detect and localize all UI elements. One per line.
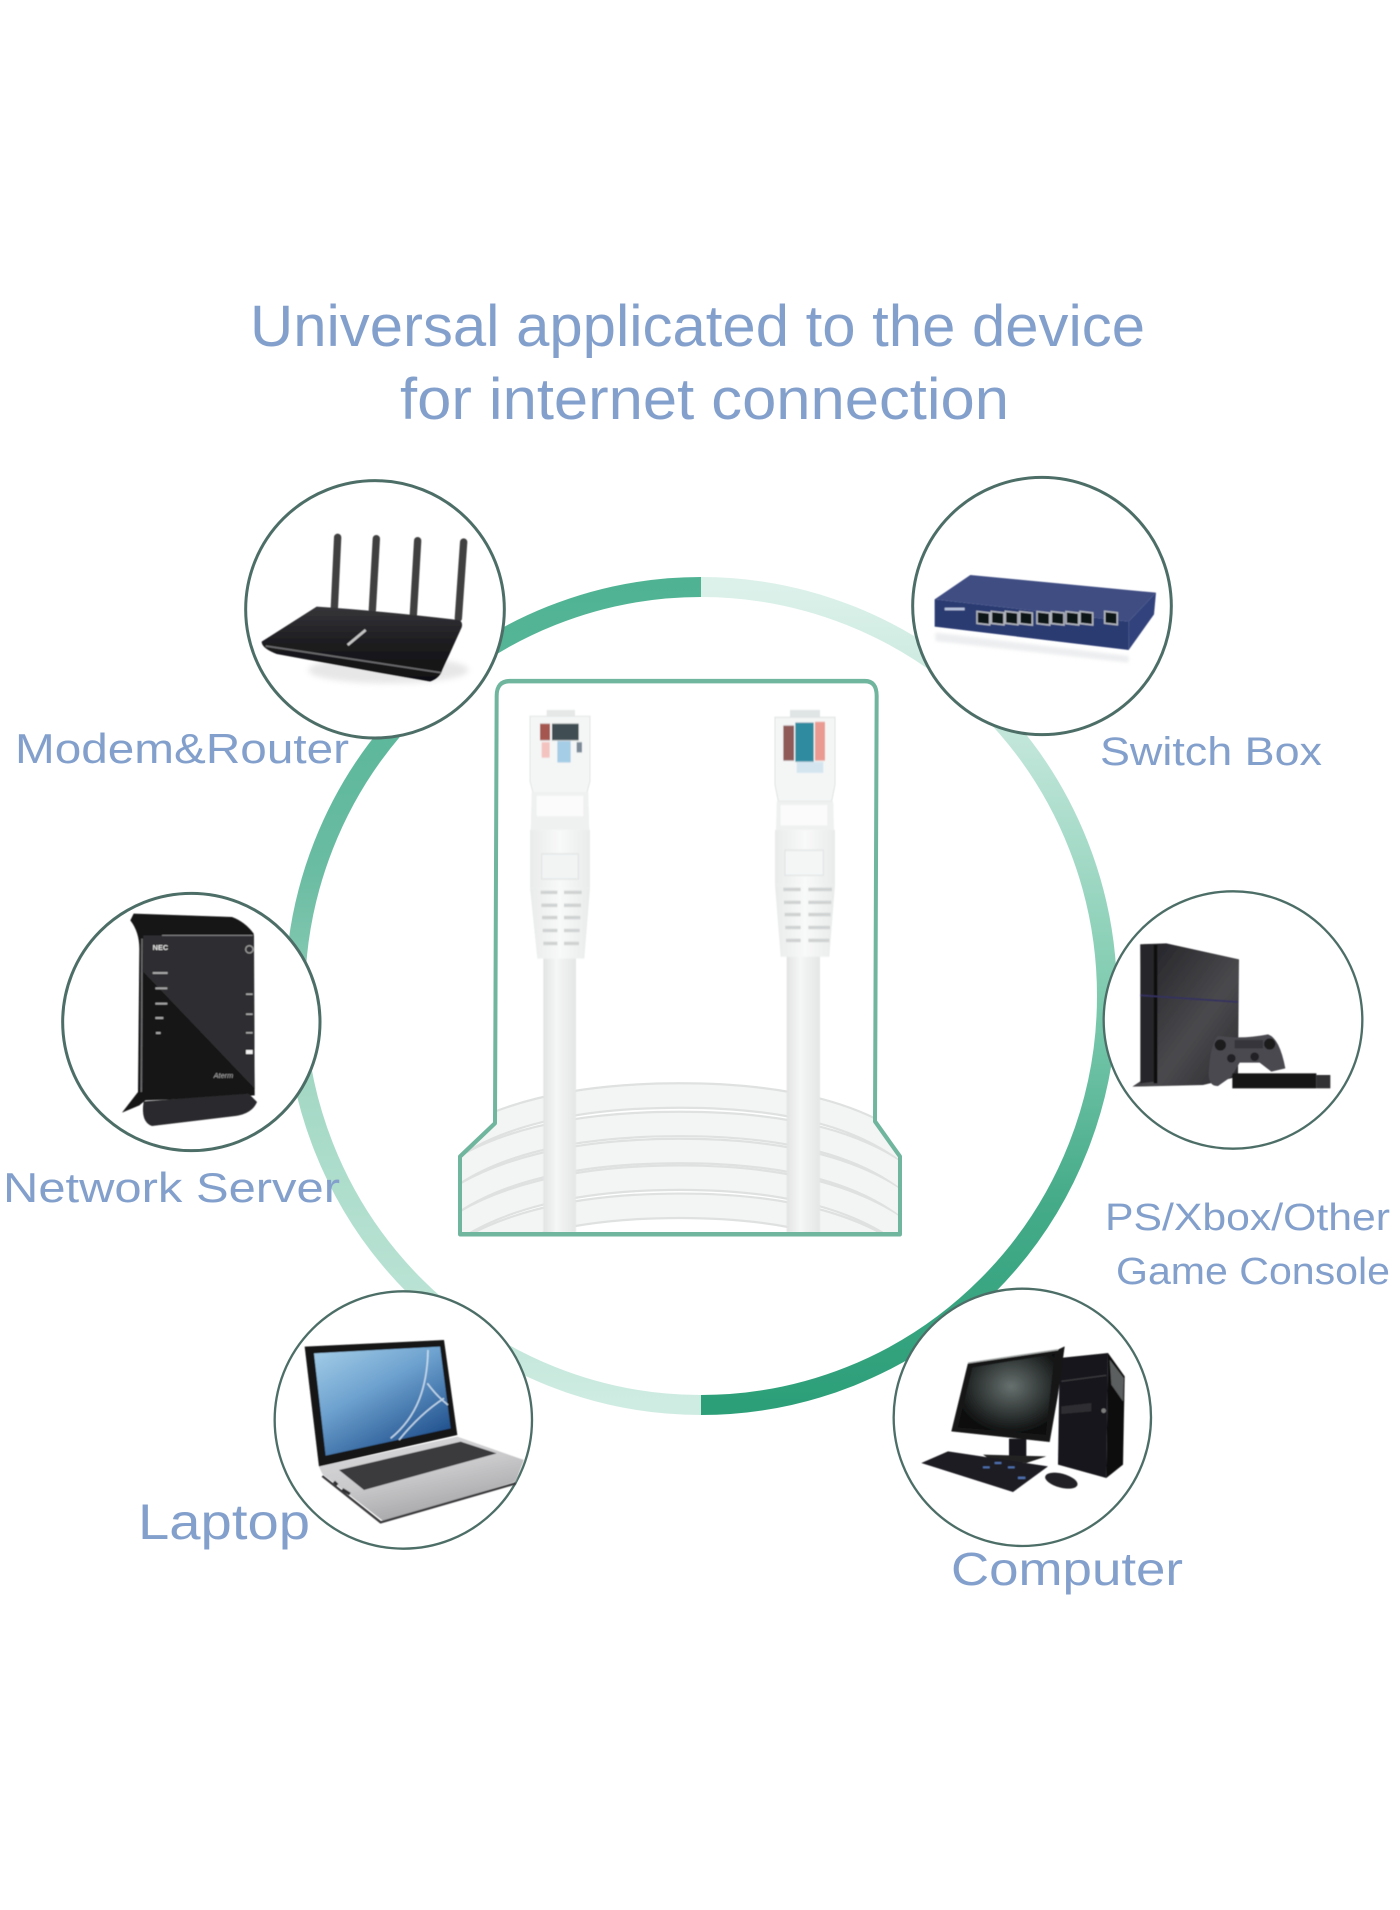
circle: laptop bbox=[275, 1291, 532, 1549]
circle: computer bbox=[894, 1289, 1151, 1546]
label: switch box: Switch Box bbox=[1100, 730, 1322, 774]
title: Universal applicated to the device bbox=[250, 294, 1145, 359]
cable coils bbox=[462, 1082, 898, 1232]
connection ring bbox=[295, 587, 1107, 1405]
circle: modem and router bbox=[246, 481, 504, 738]
icon: router bbox=[262, 537, 468, 683]
ethernet cable panel bbox=[437, 681, 923, 1279]
icon: wireless server: Aterm bbox=[213, 1071, 233, 1080]
label: game console bbox=[1105, 1197, 1390, 1293]
label: laptop: Laptop bbox=[138, 1494, 310, 1550]
label: computer: Computer bbox=[951, 1543, 1183, 1595]
label: network server: Network Server bbox=[3, 1164, 340, 1211]
left plug bbox=[530, 710, 590, 1232]
label: modem and router: Modem&Router bbox=[15, 725, 349, 772]
label: game console: Game Console bbox=[1116, 1251, 1390, 1293]
icon: wireless server bbox=[122, 914, 257, 1126]
title bbox=[250, 294, 1145, 432]
icon: laptop bbox=[305, 1340, 524, 1522]
icon: desktop computer bbox=[921, 1346, 1125, 1492]
right plug bbox=[775, 710, 835, 1232]
icon: console and controller bbox=[1132, 943, 1330, 1088]
label: game console: PS/Xbox/Other bbox=[1105, 1197, 1390, 1239]
icon: wireless server: NEC bbox=[153, 943, 169, 952]
panel frame bbox=[460, 681, 900, 1234]
title: for internet connection bbox=[400, 367, 1009, 432]
icon: network switch bbox=[935, 575, 1156, 663]
circle: game console bbox=[1104, 891, 1362, 1149]
circle: switch box bbox=[913, 477, 1171, 735]
circle: network server bbox=[63, 893, 320, 1151]
